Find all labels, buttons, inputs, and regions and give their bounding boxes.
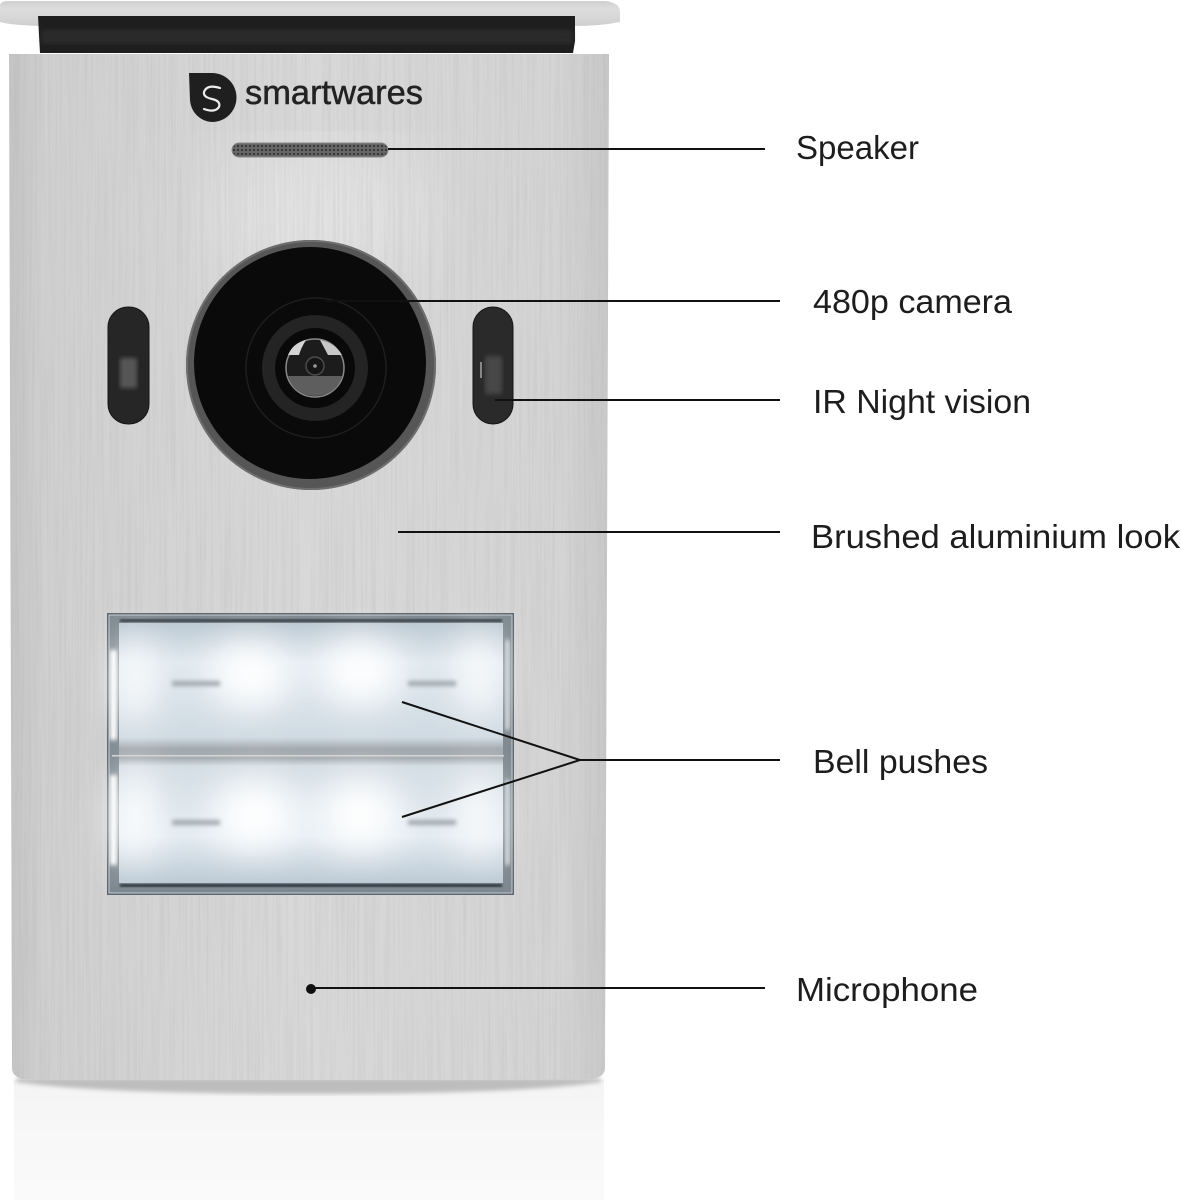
dark frame lines (120, 619, 502, 622)
divider (112, 755, 504, 756)
callout: Bell pushes (402, 702, 988, 817)
mounting plate (0, 1, 620, 53)
camera (186, 240, 436, 490)
callout: Bell pushes: Bell pushes (813, 743, 988, 780)
callout: Microphone: Microphone (796, 971, 978, 1008)
lens collar (262, 315, 368, 421)
bell push surface (119, 623, 503, 883)
icon: logo drop (189, 73, 236, 122)
camera bezel (186, 240, 436, 490)
reflection below device (14, 1080, 604, 1200)
glow spots (115, 631, 496, 863)
microphone hole (306, 984, 316, 994)
callout: IR Night vision: IR Night vision (813, 383, 1031, 420)
bell push panel (107, 613, 514, 895)
bright frame edges (110, 650, 117, 740)
callout: 480p camera: 480p camera (813, 283, 1013, 320)
callout: Brushed aluminium look: Brushed aluminium look (811, 518, 1181, 555)
IR window: left (108, 307, 149, 424)
lens glass (286, 339, 344, 397)
speaker grille (232, 143, 388, 157)
logo wordmark: smartwares (245, 74, 423, 112)
dark marks (172, 681, 456, 825)
callout: Speaker: Speaker (796, 129, 919, 166)
IR window: right (473, 307, 513, 424)
panel frame (107, 613, 514, 895)
smartwares logo (189, 73, 423, 122)
device body: brushed aluminium (9, 54, 609, 1094)
inner ring arc (246, 298, 386, 438)
